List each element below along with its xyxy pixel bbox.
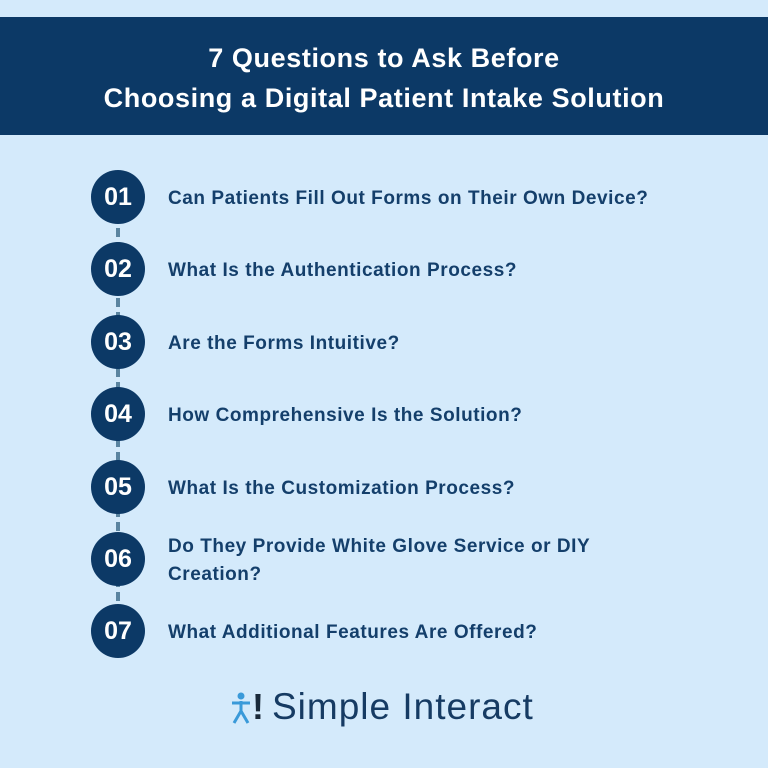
item 01: Can Patients Fill Out Forms on Their Own Device?: [168, 188, 648, 209]
item 05: What Is the Customization Process?: [168, 478, 515, 499]
item 07: [91, 604, 537, 658]
icon: person: [232, 692, 250, 724]
item 03: 03: [104, 328, 132, 356]
item 04: [91, 387, 522, 441]
item 03: Are the Forms Intuitive?: [168, 333, 400, 354]
item 01: [91, 170, 648, 224]
title: [0, 17, 768, 135]
item 04: 04: [104, 400, 132, 428]
item 03: [91, 315, 400, 369]
title: 7 Questions to Ask Before: [208, 43, 560, 73]
title: Choosing a Digital Patient Intake Solution: [104, 83, 664, 113]
item 02: What Is the Authentication Process?: [168, 260, 517, 281]
item 05: 05: [104, 473, 132, 501]
item 07: 07: [104, 617, 132, 645]
logo: Simple Interact: [272, 686, 534, 727]
item 05: [91, 460, 515, 514]
item 02: 02: [104, 255, 132, 283]
logo: !: [252, 686, 264, 727]
item 06: 06: [104, 545, 132, 573]
item 06: Do They Provide White Glove Service or DIY Creation?: [168, 536, 590, 585]
item 02: [91, 242, 517, 296]
item 07: What Additional Features Are Offered?: [168, 622, 537, 643]
item 04: How Comprehensive Is the Solution?: [168, 405, 522, 426]
item 01: 01: [104, 183, 132, 211]
dashed connector: [116, 200, 120, 630]
